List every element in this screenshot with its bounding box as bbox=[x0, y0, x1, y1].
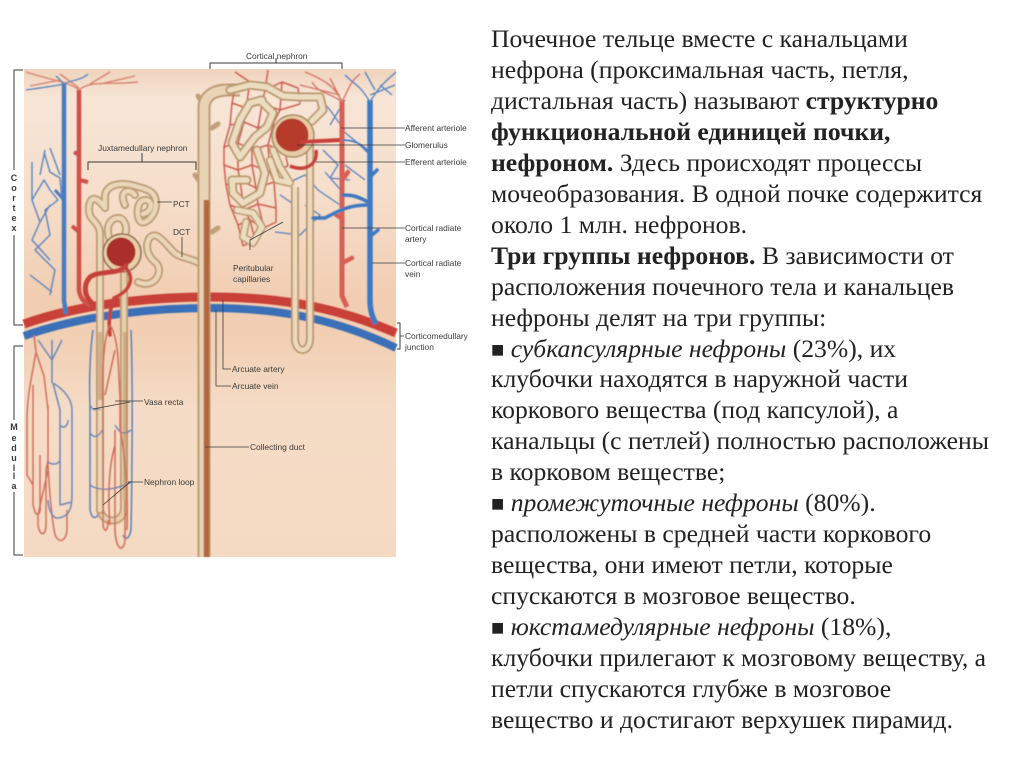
text block: nephron description: в корковом веществе; bbox=[491, 457, 725, 486]
text block: nephron description: коркового вещества (под капсулой), а bbox=[491, 395, 898, 424]
side labels: cortex and medulla bbox=[10, 173, 18, 491]
text block: nephron description: клубочки находятся в наружной части bbox=[491, 364, 908, 393]
text block: nephron description: функциональной единицей почки, bbox=[491, 117, 890, 146]
side labels: cortex and medulla: l bbox=[13, 463, 15, 473]
text block: nephron description: вещества, они имеют петли, которые bbox=[491, 550, 893, 579]
medulla vessels left bbox=[27, 335, 72, 540]
labels: Arcuate artery bbox=[232, 364, 285, 374]
text block: nephron description: клубочки прилегают к мозговому веществу, а bbox=[491, 643, 986, 672]
brackets: cortex and medulla bbox=[14, 58, 400, 555]
text block: nephron description: нефроны делят на три группы: bbox=[491, 303, 826, 332]
side labels: cortex and medulla: r bbox=[12, 193, 16, 203]
labels: Nephron loop bbox=[144, 477, 195, 487]
diagram: nephron anatomy bbox=[10, 51, 469, 558]
labels: Efferent arteriole bbox=[405, 157, 467, 167]
peritubular capillaries bbox=[224, 70, 300, 246]
text block: nephron description: мочеобразования. В одной почке содержится bbox=[491, 179, 982, 208]
text block: nephron description: ■ юкстамедулярные нефроны (18%), bbox=[491, 612, 891, 641]
labels: artery bbox=[405, 234, 427, 244]
side labels: cortex and medulla: C bbox=[11, 173, 18, 183]
text block: nephron description: петли спускаются глубже в мозговое bbox=[491, 674, 891, 703]
text block: nephron description: Почечное тельце вместе с канальцами bbox=[491, 24, 908, 53]
side labels: cortex and medulla: l bbox=[13, 471, 15, 481]
labels: Afferent arteriole bbox=[405, 123, 467, 133]
labels: Vasa recta bbox=[144, 397, 184, 407]
renal corpuscle bbox=[272, 115, 314, 157]
labels: capillaries bbox=[233, 274, 270, 284]
side labels: cortex and medulla: t bbox=[12, 203, 16, 213]
text block: nephron description: канальцы (с петлей) полностью расположены bbox=[491, 426, 989, 455]
text block: nephron description: около 1 млн. нефронов. bbox=[491, 210, 747, 239]
cortical nephron bbox=[224, 70, 370, 350]
labels: Peritubular bbox=[233, 263, 274, 273]
labels: DCT bbox=[173, 227, 190, 237]
labels: Cortical radiate bbox=[405, 223, 462, 233]
text block: nephron description: нефроном. Здесь происходят процессы bbox=[491, 148, 922, 177]
side labels: cortex and medulla: d bbox=[11, 443, 17, 453]
loop of cortical nephron bbox=[295, 140, 310, 350]
labels: Juxtamedullary nephron bbox=[98, 143, 188, 153]
side labels: cortex and medulla: o bbox=[11, 183, 17, 193]
text block: nephron description: Три группы нефронов. В зависимости от bbox=[491, 241, 954, 270]
text block: nephron description: расположения почечного тела и канальцев bbox=[491, 272, 954, 301]
side labels: cortex and medulla: M bbox=[10, 422, 18, 432]
collecting duct bbox=[195, 90, 240, 557]
text block: nephron description: расположены в средней части коркового bbox=[491, 519, 931, 548]
medulla vessels center bbox=[90, 325, 132, 548]
left cortical vessels bbox=[26, 72, 138, 314]
glomerulus bbox=[106, 238, 136, 266]
labels: PCT bbox=[173, 199, 190, 209]
cortical radiate vessels bbox=[300, 72, 396, 324]
labels: Cortical radiate bbox=[405, 258, 462, 268]
text block: nephron description: вещество и достигают верхушек пирамид. bbox=[491, 705, 953, 734]
text block: nephron description: ■ субкапсулярные нефроны (23%), их bbox=[491, 334, 896, 363]
text block: nephron description: дистальная часть) называют структурно bbox=[491, 86, 938, 115]
labels: junction bbox=[404, 342, 434, 352]
side labels: cortex and medulla: u bbox=[11, 453, 17, 463]
text block: nephron description bbox=[491, 24, 989, 734]
side labels: cortex and medulla: a bbox=[11, 481, 17, 491]
juxtamedullary nephron bbox=[85, 184, 199, 520]
text block: nephron description: нефрона (проксимальная часть, петля, bbox=[491, 55, 908, 84]
labels: Glomerulus bbox=[405, 140, 448, 150]
labels: vein bbox=[405, 269, 421, 279]
side labels: cortex and medulla: e bbox=[11, 433, 17, 443]
side labels: cortex and medulla: x bbox=[11, 223, 17, 233]
labels: Cortical nephron bbox=[246, 51, 308, 61]
labels: Collecting duct bbox=[250, 442, 306, 452]
side labels: cortex and medulla: e bbox=[11, 213, 17, 223]
labels: Arcuate vein bbox=[232, 381, 279, 391]
arcuate artery and vein bbox=[24, 297, 396, 348]
text block: nephron description: спускаются в мозговое вещество. bbox=[491, 581, 856, 610]
labels bbox=[98, 51, 469, 487]
tissue background bbox=[24, 69, 396, 557]
leader lines bbox=[93, 128, 405, 505]
labels: Corticomedullary bbox=[405, 331, 469, 341]
text block: nephron description: ■ промежуточные нефроны (80%). bbox=[491, 488, 876, 517]
